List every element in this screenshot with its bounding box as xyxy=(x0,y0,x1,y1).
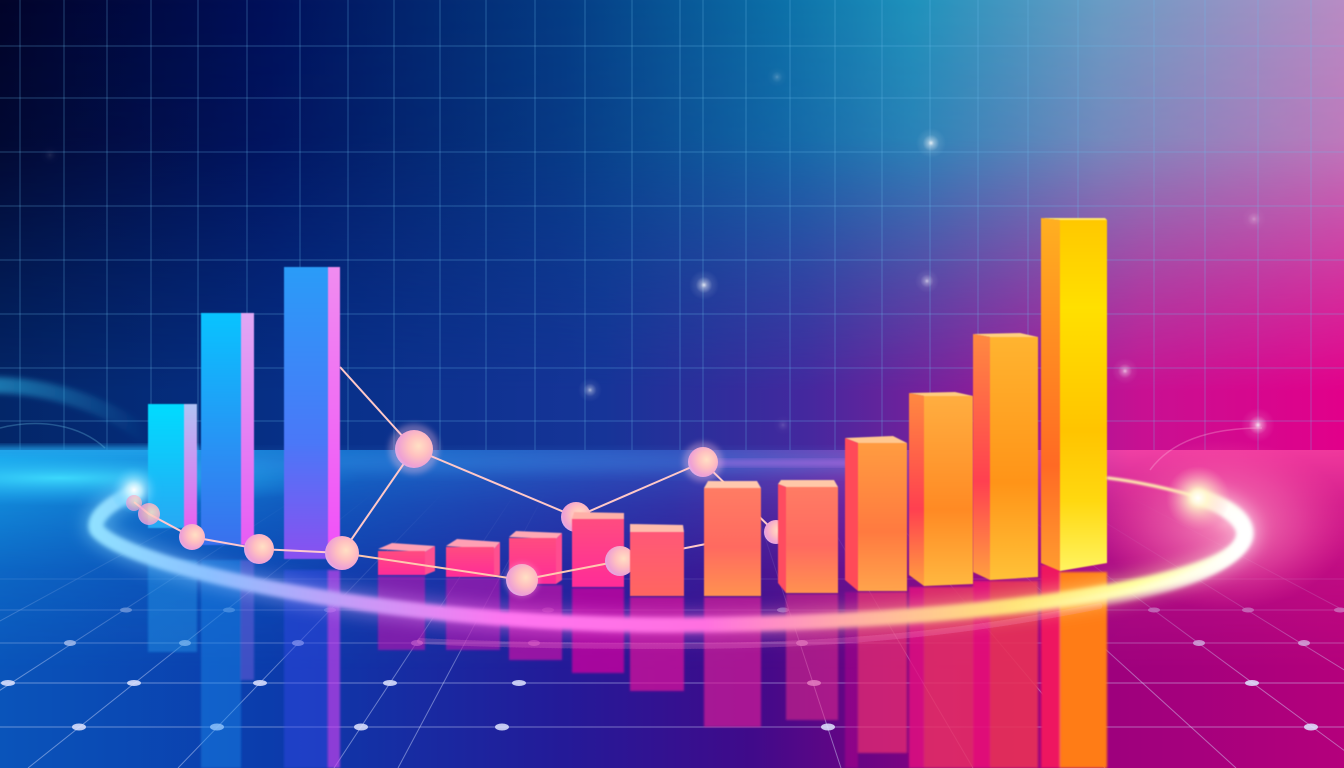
floor surface xyxy=(0,450,1344,768)
right ring flare xyxy=(1166,466,1230,530)
bar reflections on the floor xyxy=(148,560,1107,768)
bar 12: orange xyxy=(909,392,973,586)
bar 14: tallest yellow xyxy=(1041,218,1107,571)
bar 10: coral orange xyxy=(778,480,838,593)
bar 13: amber xyxy=(973,333,1038,580)
bar 7: pink xyxy=(572,512,624,587)
bar 3: blue-violet xyxy=(284,267,340,559)
background wall gradient xyxy=(0,0,1344,460)
data nodes behind bars xyxy=(389,424,788,544)
bar 8: coral xyxy=(630,524,684,596)
bar 6: small pink xyxy=(509,531,562,584)
line chart connectors behind bars xyxy=(340,367,775,561)
horizon glow band xyxy=(0,446,870,506)
bar 2: sky blue xyxy=(201,313,254,545)
bar 11: orange xyxy=(845,436,907,591)
wall grid xyxy=(0,0,1344,452)
bar 1: cyan xyxy=(148,404,197,528)
right thin halo arc xyxy=(1150,428,1262,470)
right pink halo xyxy=(1100,440,1344,610)
connector over low bars xyxy=(342,553,620,580)
bar 4: small pink xyxy=(378,543,435,575)
bar 5: small pink xyxy=(446,539,500,577)
glowing ring around the chart xyxy=(96,478,1246,646)
glowing background particles xyxy=(40,67,1275,442)
bar 9: coral xyxy=(704,481,761,596)
left swoosh arcs xyxy=(0,385,148,448)
left ring flare xyxy=(110,466,158,514)
front data nodes on the left xyxy=(126,495,359,570)
floor grid lines and nodes xyxy=(0,520,1344,768)
data nodes in front of small bars xyxy=(505,546,635,597)
